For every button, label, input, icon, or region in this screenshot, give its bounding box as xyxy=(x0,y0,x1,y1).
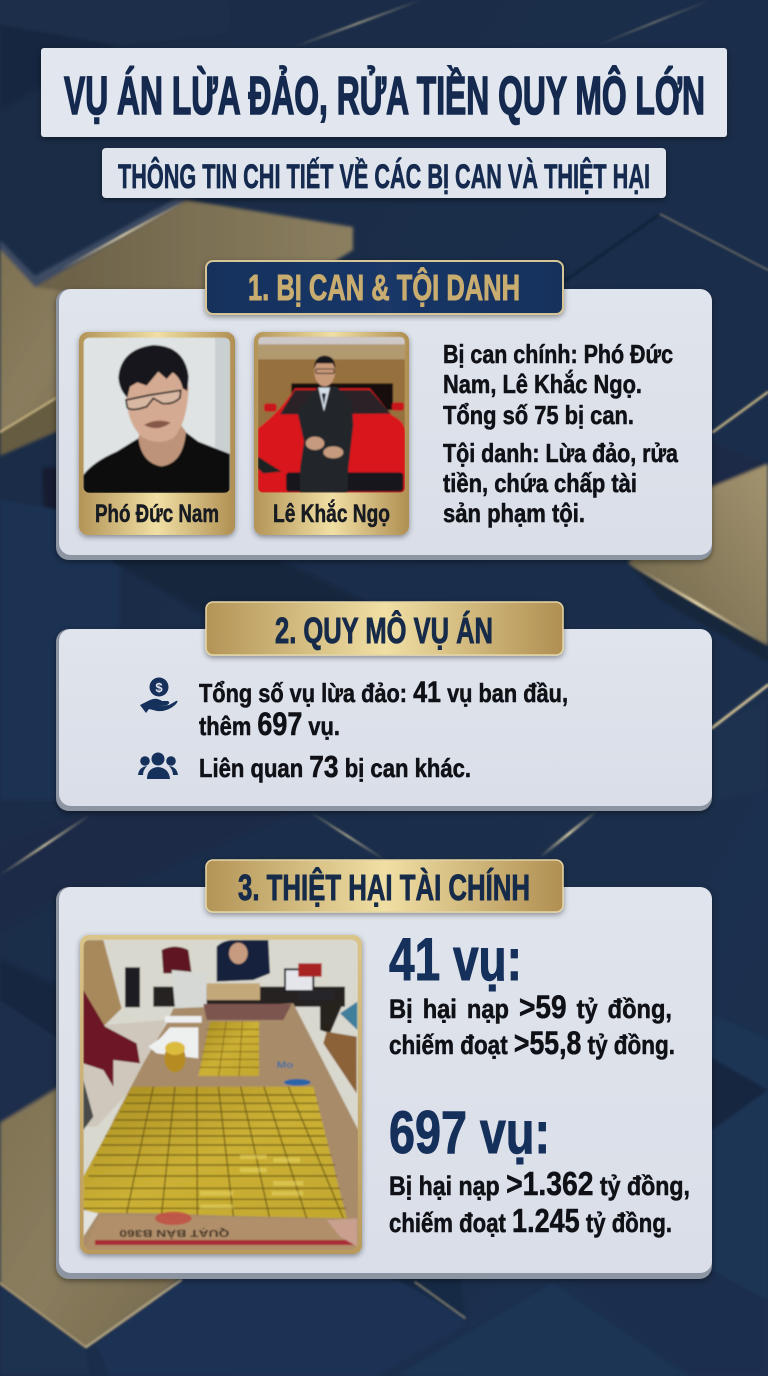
photo: seized gold bars: Mo xyxy=(277,1060,294,1070)
panel: 3. financial damage xyxy=(56,887,712,1279)
subtitle box xyxy=(102,148,666,198)
icon: hand holding coin: $ xyxy=(155,680,163,695)
stat: 697 cases xyxy=(389,1099,690,1239)
badge: section 3 heading xyxy=(206,860,563,912)
badge: section 2 heading: 2. QUY MÔ VỤ ÁN xyxy=(275,609,493,651)
stat: 697 cases: chiếm đoạt 1.245 tỷ đồng. xyxy=(389,1202,672,1239)
photo: seized gold bars xyxy=(80,935,362,1254)
gold bars upper group xyxy=(198,1022,259,1076)
gold bars lower group xyxy=(83,1087,347,1218)
caption: Lê Khắc Ngọ xyxy=(273,498,390,528)
icon: people xyxy=(138,752,178,779)
text: related suspects: Liên quan 73 bị can khác. xyxy=(199,749,471,784)
panel: 1. suspects and charges xyxy=(56,289,712,560)
stat: 697 cases: 697 vụ: xyxy=(389,1099,550,1166)
badge: section 1 heading: 1. BỊ CAN & TỘI DANH xyxy=(248,266,520,308)
badge: section 2 heading xyxy=(206,602,563,655)
stat: 697 cases: Bị hại nạp >1.362 tỷ đồng, xyxy=(389,1165,690,1202)
photo card: Lê Khắc Ngọ xyxy=(254,332,409,535)
text: additional cases: thêm 697 vụ. xyxy=(199,706,340,742)
text block: suspects: Nam, Lê Khắc Ngọ. xyxy=(443,369,642,399)
text block: suspects xyxy=(443,339,678,528)
title box xyxy=(41,48,727,137)
photo card: Phó Đức Nam xyxy=(79,332,235,535)
caption: Phó Đức Nam xyxy=(95,500,219,528)
text block: suspects: Tội danh: Lừa đảo, rửa xyxy=(443,438,678,468)
stat: 41 cases: Bị hại nạp >59 tỷ đồng, xyxy=(389,989,672,1025)
stat: 41 cases: 41 vụ: xyxy=(389,926,522,993)
text: total fraud cases: Tổng số vụ lừa đảo: 41 vụ ban đầu, xyxy=(199,676,568,709)
text block: suspects: Bị can chính: Phó Đức xyxy=(443,339,673,369)
icon: hand holding coin xyxy=(140,678,178,713)
panel: 2. case scale xyxy=(56,629,712,811)
text block: suspects: Tổng số 75 bị can. xyxy=(443,400,634,430)
text block: suspects: sản phạm tội. xyxy=(443,498,585,528)
stat: 41 cases xyxy=(389,926,675,1061)
photo: seized gold bars: QUẠT BÀN B360 xyxy=(119,1227,229,1240)
badge: section 1 heading xyxy=(206,261,563,314)
badge: section 3 heading: 3. THIỆT HẠI TÀI CHÍNH xyxy=(238,866,530,908)
text block: suspects: tiền, chứa chấp tài xyxy=(443,468,637,498)
stat: 41 cases: chiếm đoạt >55,8 tỷ đồng. xyxy=(389,1025,675,1061)
